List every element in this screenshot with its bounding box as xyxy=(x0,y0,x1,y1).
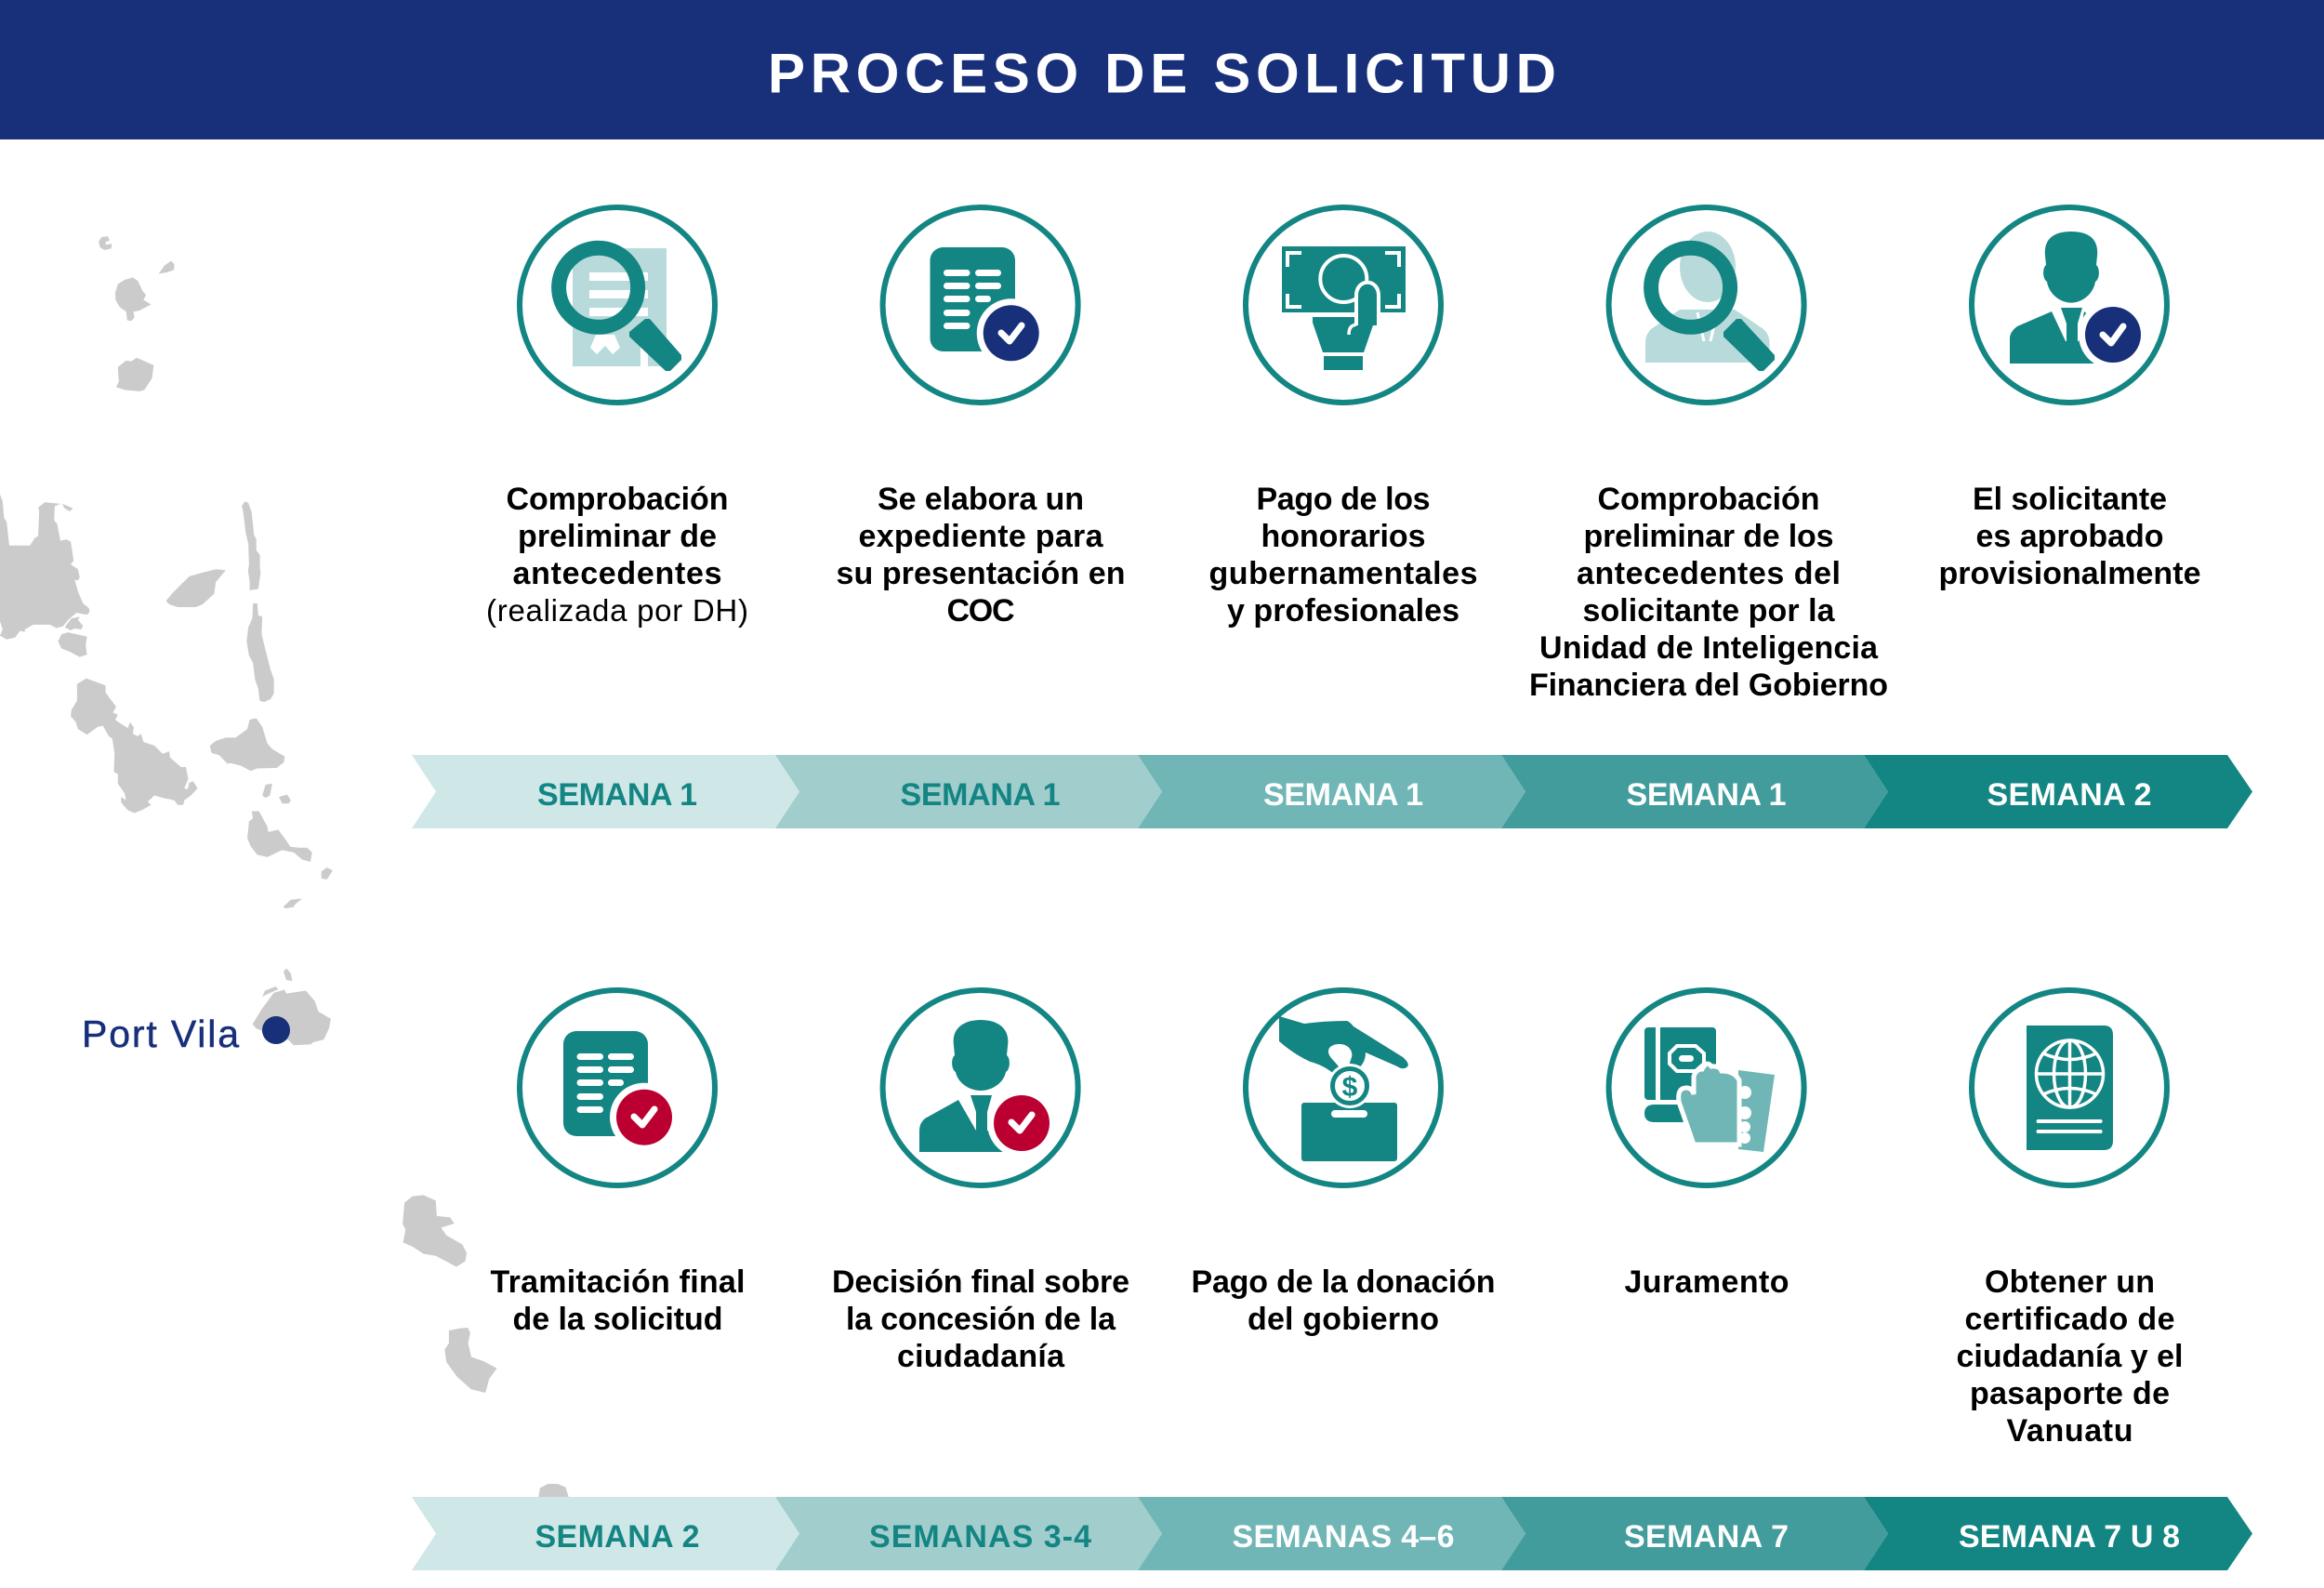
step text: row 1, column 4: Financiera del Gobierno xyxy=(1529,668,1888,703)
step text: row 2, column 2: ciudadanía xyxy=(897,1339,1065,1374)
icon: document with red check xyxy=(520,990,715,1185)
step text: row 1, column 2: su presentación en xyxy=(837,556,1125,591)
step text: row 2, column 2: la concesión de la xyxy=(846,1302,1116,1337)
step text: row 1, column 5: provisionalmente xyxy=(1939,556,2201,591)
step text: row 2, column 1: de la solicitud xyxy=(513,1302,723,1337)
step text: row 1, column 4: preliminar de los xyxy=(1584,519,1833,554)
icon: person with red check xyxy=(883,990,1078,1185)
step text: row 2, column 4: Juramento xyxy=(1625,1264,1789,1300)
step text: row 1, column 4: Comprobación xyxy=(1597,482,1820,517)
timeline: row 1 weeks: SEMANA 1 xyxy=(537,777,697,813)
icon: hand raised for oath with book and paper xyxy=(1609,990,1804,1185)
icon: hand dropping coin in box: $ xyxy=(1342,1072,1358,1103)
step text: row 1, column 2: expediente para xyxy=(859,519,1104,554)
step text: row 2, column 5: pasaporte de xyxy=(1970,1376,2170,1411)
step text: row 1, column 4 xyxy=(1529,482,1888,703)
icon: document with blue check xyxy=(883,207,1078,403)
step text: row 1, column 1: Comprobación xyxy=(506,482,729,517)
timeline: row 2 weeks: SEMANA 2 xyxy=(535,1519,699,1555)
step text: row 2, column 1: Tramitación final xyxy=(491,1264,746,1300)
icon: magnifier over certificate xyxy=(520,207,715,403)
label: Port Vila: Port Vila xyxy=(82,1012,239,1055)
timeline: row 2 weeks: SEMANA 7 xyxy=(1624,1519,1789,1555)
timeline: row 2 weeks: SEMANAS 3-4 xyxy=(869,1519,1091,1555)
timeline: row 1 weeks: SEMANA 1 xyxy=(1263,777,1423,813)
step text: row 1, column 5: es aprobado xyxy=(1976,519,2164,554)
step text: row 1, column 3: gubernamentales xyxy=(1208,556,1478,591)
step text: row 1, column 5: El solicitante xyxy=(1973,482,2167,517)
step text: row 2, column 2 xyxy=(832,1264,1129,1374)
step text: row 1, column 1: antecedentes xyxy=(513,556,721,591)
step text: row 1, column 2 xyxy=(837,482,1125,629)
step text: row 1, column 2: COC xyxy=(946,593,1015,629)
timeline: row 2 weeks xyxy=(412,1497,2252,1570)
header: title banner: PROCESO DE SOLICITUD xyxy=(768,43,1556,104)
step text: row 1, column 5 xyxy=(1939,482,2201,591)
timeline: row 2 weeks: SEMANAS 4–6 xyxy=(1233,1519,1454,1555)
step text: row 2, column 3: del gobierno xyxy=(1248,1302,1439,1337)
step text: row 2, column 5 xyxy=(1956,1264,2183,1449)
icon: hand holding banknote xyxy=(1246,207,1441,403)
northern and central islands xyxy=(0,236,333,908)
step text: row 1, column 1: preliminar de xyxy=(518,519,717,554)
icon: magnifier over person xyxy=(1609,207,1804,403)
step text: row 1, column 2: Se elabora un xyxy=(878,482,1084,517)
timeline: row 1 weeks xyxy=(412,755,2252,828)
icon: passport xyxy=(1972,990,2167,1185)
step text: row 2, column 5: Obtener un xyxy=(1985,1264,2155,1300)
step text: row 1, column 3: Pago de los xyxy=(1257,482,1430,517)
step text: row 2, column 3: Pago de la donación xyxy=(1192,1264,1495,1300)
step text: row 1, column 1 xyxy=(486,482,748,628)
step text: row 1, column 4: solicitante por la xyxy=(1582,593,1836,629)
step text: row 2, column 5: ciudadanía y el xyxy=(1956,1339,2183,1374)
step text: row 2, column 5: certificado de xyxy=(1965,1302,2175,1337)
step text: row 1, column 3 xyxy=(1208,482,1478,629)
step text: row 2, column 3 xyxy=(1192,1264,1495,1337)
step text: row 2, column 1 xyxy=(491,1264,746,1337)
step text: row 1, column 1: (realizada por DH) xyxy=(486,593,748,628)
header: title banner xyxy=(0,0,2324,139)
step text: row 2, column 5: Vanuatu xyxy=(2006,1413,2133,1449)
step text: row 1, column 4: Unidad de Inteligencia xyxy=(1539,630,1879,666)
timeline: row 1 weeks: SEMANA 1 xyxy=(1627,777,1787,813)
step text: row 1, column 3: honorarios xyxy=(1261,519,1426,554)
timeline: row 1 weeks: SEMANA 2 xyxy=(1987,777,2151,813)
step text: row 2, column 2: Decisión final sobre xyxy=(832,1264,1129,1300)
icon: hand dropping coin in box xyxy=(1246,990,1441,1185)
icon: person with blue check xyxy=(1972,207,2167,403)
timeline: row 2 weeks: SEMANA 7 U 8 xyxy=(1959,1519,2180,1555)
timeline: row 1 weeks: SEMANA 1 xyxy=(900,777,1060,813)
step text: row 1, column 3: y profesionales xyxy=(1227,593,1459,629)
map: Vanuatu islands xyxy=(0,236,569,1499)
step text: row 1, column 4: antecedentes del xyxy=(1577,556,1841,591)
southern islands xyxy=(253,969,569,1499)
